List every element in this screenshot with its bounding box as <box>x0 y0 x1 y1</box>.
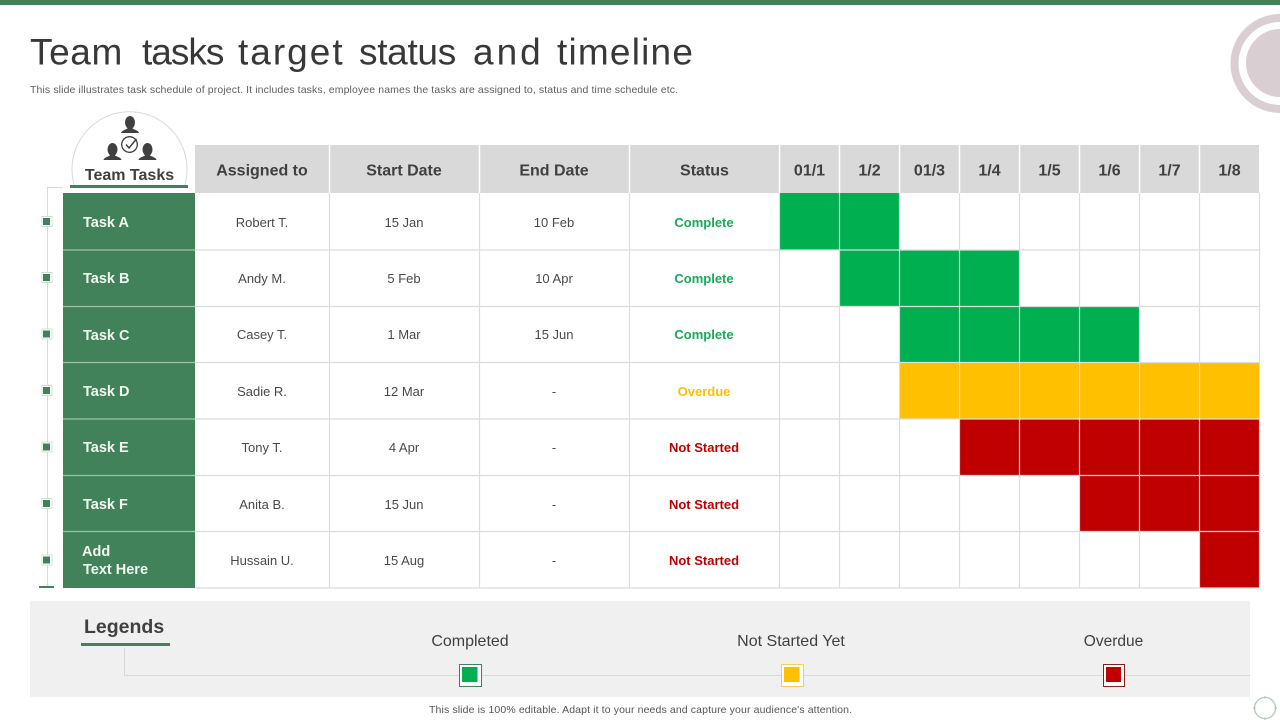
task name column: Task A <box>83 215 129 231</box>
decorative corner circles <box>1234 18 1280 109</box>
subtitle: This slide illustrates task schedule of project. It includes tasks, employee names the tasks are assigned to, status and time schedule etc. <box>30 84 678 96</box>
badge label: Team Tasks <box>85 167 174 184</box>
table header row: 1/4 <box>978 162 1001 180</box>
assigned to column: Hussain U. <box>230 553 294 568</box>
team tasks badge <box>70 112 188 188</box>
table header row: End Date <box>519 162 589 180</box>
table header row: 1/7 <box>1158 162 1181 180</box>
left connector line <box>39 188 63 588</box>
footer note: This slide is 100% editable. Adapt it to your needs and capture your audience's attention. <box>429 704 852 716</box>
assigned to column: Anita B. <box>239 497 285 512</box>
icon: team with check mark <box>104 116 156 160</box>
table header row: 1/2 <box>858 162 881 180</box>
status column: Complete <box>674 215 734 230</box>
legend item: completed: Completed <box>431 633 509 650</box>
start date column: 15 Jun <box>384 497 424 512</box>
start date column: 12 Mar <box>384 384 425 399</box>
assigned to column: Robert T. <box>236 215 288 230</box>
start date column <box>384 215 425 568</box>
title: timeline <box>557 32 694 72</box>
start date column: 15 Jan <box>384 215 424 230</box>
icon: small corner circle <box>1253 696 1277 720</box>
end date column: - <box>552 497 556 512</box>
table header row: Assigned to <box>216 162 308 180</box>
task name column: Task F <box>83 497 128 513</box>
legends heading: Legends <box>84 616 164 638</box>
legend item: overdue: Overdue <box>1084 633 1143 650</box>
end date column: - <box>552 553 556 568</box>
top accent bar <box>0 0 1280 5</box>
end date column: 15 Jun <box>534 327 574 342</box>
table header row: 1/5 <box>1038 162 1061 180</box>
end date column: - <box>552 384 556 399</box>
table header row: 1/6 <box>1098 162 1121 180</box>
task row bullets <box>42 216 52 565</box>
assigned to column <box>230 215 294 568</box>
task name column <box>63 193 195 588</box>
start date column: 1 Mar <box>387 327 421 342</box>
end date column: - <box>552 440 556 455</box>
task name column: Task D <box>83 384 129 400</box>
task name column: Add <box>82 544 110 560</box>
start date column: 15 Aug <box>384 553 424 568</box>
status column: Not Started <box>669 440 739 455</box>
assigned to column: Tony T. <box>242 440 282 455</box>
title: target <box>238 32 357 72</box>
title: status <box>359 32 466 72</box>
end date column: 10 Feb <box>534 215 574 230</box>
legend item: completed <box>431 633 509 686</box>
assigned to column: Casey T. <box>237 327 287 342</box>
table header row <box>195 145 1259 193</box>
table header row: 01/1 <box>794 162 825 180</box>
title: Team <box>30 32 134 72</box>
start date column: 5 Feb <box>387 271 421 286</box>
assigned to column: Sadie R. <box>237 384 287 399</box>
end date column: 10 Apr <box>535 271 573 286</box>
legend item: not started yet <box>737 633 845 686</box>
start date column: 4 Apr <box>389 440 420 455</box>
panel: legends <box>30 601 1250 697</box>
assigned to column: Andy M. <box>238 271 286 286</box>
table header row: Status <box>680 162 729 180</box>
status column: Complete <box>674 271 734 286</box>
status column: Complete <box>674 327 734 342</box>
table grid <box>195 193 1260 588</box>
legend item: overdue <box>1084 633 1143 686</box>
task name column: Task E <box>83 440 129 456</box>
table header row: 01/3 <box>914 162 945 180</box>
gantt bars <box>779 193 1259 588</box>
status column: Not Started <box>669 553 739 568</box>
task name column: Task B <box>83 271 129 287</box>
status column: Not Started <box>669 497 739 512</box>
legend item: not started yet: Not Started Yet <box>737 633 845 650</box>
task name column: Text Here <box>83 562 148 578</box>
end date column <box>534 215 574 568</box>
title: tasks <box>142 32 233 72</box>
status column <box>669 215 739 568</box>
table header row: 1/8 <box>1218 162 1241 180</box>
table header row: Start Date <box>366 162 442 180</box>
title: and <box>473 32 557 72</box>
task name column: Task C <box>83 328 130 344</box>
status column: Overdue <box>678 384 730 399</box>
